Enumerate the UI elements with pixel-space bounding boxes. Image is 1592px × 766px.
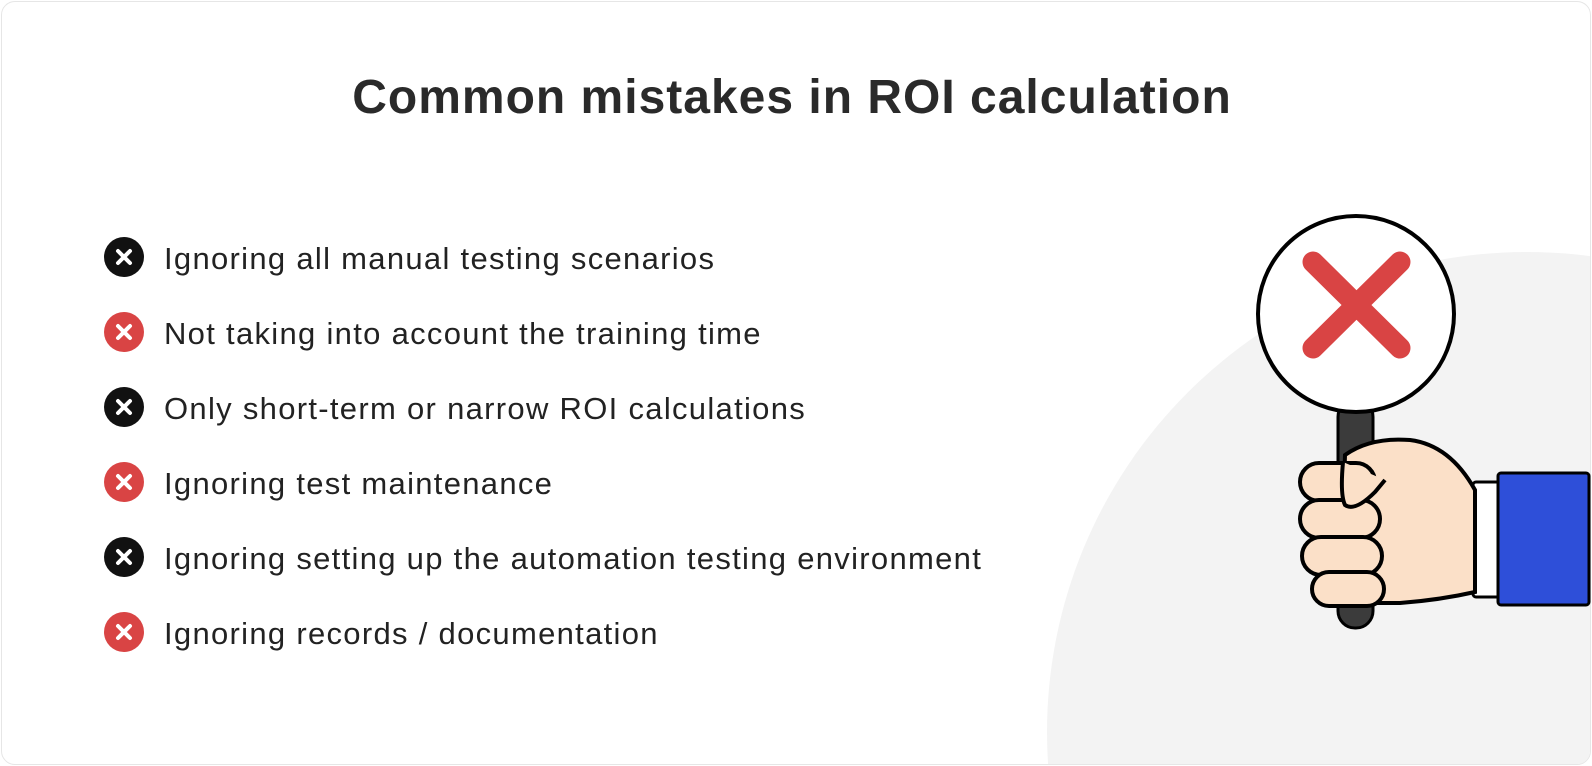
item 3: Only short-term or narrow ROI calculations — [164, 391, 806, 426]
title: Common mistakes in ROI calculation — [352, 71, 1232, 124]
sign — [1258, 216, 1454, 412]
item 1: Ignoring all manual testing scenarios — [164, 241, 715, 276]
handle — [1338, 400, 1373, 628]
item 2: Not taking into account the training time — [164, 316, 762, 351]
item 6: Ignoring records / documentation — [164, 616, 659, 651]
sleeve — [1473, 473, 1589, 605]
illustration: hand holding X sign — [1256, 214, 1590, 630]
list of mistakes — [104, 237, 982, 652]
item 4: Ignoring test maintenance — [164, 466, 553, 501]
hand — [1300, 440, 1475, 606]
item 5: Ignoring setting up the automation testing environment — [164, 541, 982, 576]
